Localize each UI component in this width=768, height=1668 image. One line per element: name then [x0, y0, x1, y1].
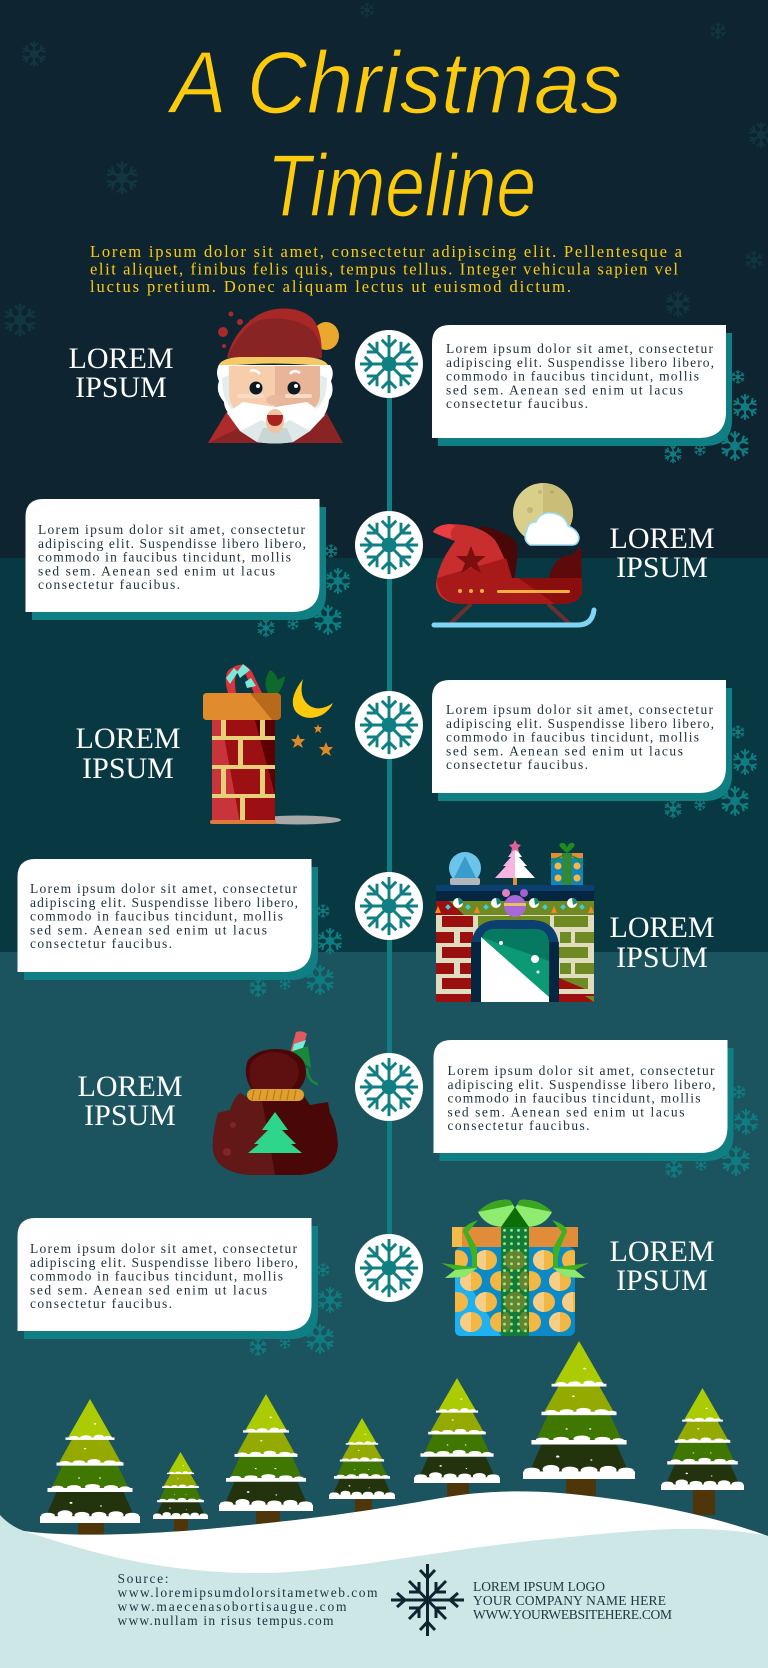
card 1: sed sem. Aenean sed enim ut lacus: [446, 382, 683, 397]
card 5: Lorem ipsum dolor sit amet, consectetur: [448, 1063, 715, 1078]
timeline node 4: [355, 872, 423, 940]
icon: santa: [208, 308, 343, 444]
icon: footer snowflake: [391, 1564, 464, 1636]
intro text: luctus pretium. Donec aliquam lectus ut euismod dictum.: [90, 277, 571, 296]
card 2: commodo in faucibus tincidunt, mollis: [38, 550, 291, 565]
card 6: Lorem ipsum dolor sit amet, consectetur: [30, 1241, 298, 1256]
card 4: Lorem ipsum dolor sit amet, consectetur: [30, 881, 298, 896]
card 1: adipiscing elit. Suspendisse libero libero,: [446, 355, 714, 370]
timeline node 6: [355, 1234, 423, 1302]
row 6: [18, 1200, 714, 1356]
label: lorem ipsum 5: IPSUM: [84, 1099, 176, 1132]
card 5: sed sem. Aenean sed enim ut lacus: [448, 1104, 684, 1119]
icon: sleigh: [433, 483, 594, 625]
card 3: [432, 680, 758, 818]
card 4: commodo in faucibus tincidunt, mollis: [30, 909, 283, 924]
timeline node 3: [355, 691, 423, 759]
label: lorem ipsum 5: LOREM: [78, 1070, 182, 1103]
icon: gift: [441, 1200, 589, 1336]
row 4: [18, 840, 714, 1002]
label: lorem ipsum 1: [68, 342, 174, 404]
source text: [118, 1571, 378, 1628]
timeline node 2: [355, 511, 423, 579]
row 2: [26, 483, 714, 637]
title: [166, 33, 622, 235]
card 5: adipiscing elit. Suspendisse libero libero,: [448, 1077, 716, 1092]
card 1: [432, 325, 758, 463]
card 3: consectetur faucibus.: [446, 757, 588, 772]
row 1: [68, 308, 758, 463]
source text: www.loremipsumdolorsitametweb.com: [118, 1585, 378, 1600]
card 4: consectetur faucibus.: [30, 936, 172, 951]
timeline node 5: [355, 1053, 423, 1121]
intro text: elit aliquet, finibus felis quis, tempus tellus. Integer vehicula sapien vel: [90, 260, 678, 278]
forest of trees: [40, 1341, 744, 1538]
card 6: sed sem. Aenean sed enim ut lacus: [30, 1282, 267, 1297]
label: lorem ipsum 3: [76, 722, 180, 785]
label: lorem ipsum 6: LOREM: [610, 1235, 714, 1268]
source text: www.maecenasobortisaugue.com: [118, 1599, 347, 1614]
logo text: WWW.YOURWEBSITEHERE.COM: [473, 1607, 672, 1622]
card 3: commodo in faucibus tincidunt, mollis: [446, 730, 699, 745]
label: lorem ipsum 2: [610, 522, 714, 584]
card 5: commodo in faucibus tincidunt, mollis: [448, 1091, 700, 1106]
card 4: sed sem. Aenean sed enim ut lacus: [30, 922, 267, 937]
intro text: Lorem ipsum dolor sit amet, consectetur adipiscing elit. Pellentesque a: [90, 242, 683, 261]
footer ground: [0, 1515, 768, 1668]
card 3: sed sem. Aenean sed enim ut lacus: [446, 743, 683, 758]
icon: chimney: [203, 664, 341, 824]
card 1: consectetur faucibus.: [446, 396, 588, 411]
timeline node 1: [355, 330, 423, 398]
intro text: [90, 242, 683, 296]
card 5: consectetur faucibus.: [448, 1118, 590, 1133]
source text: www.nullam in risus tempus.com: [118, 1613, 334, 1628]
logo text: [473, 1579, 672, 1622]
card 1: Lorem ipsum dolor sit amet, consectetur: [446, 341, 714, 356]
label: lorem ipsum 4: LOREM: [610, 911, 714, 944]
title: Timeline: [267, 136, 536, 235]
card 3: Lorem ipsum dolor sit amet, consectetur: [446, 702, 714, 717]
label: lorem ipsum 4: IPSUM: [616, 941, 708, 974]
card 4: [18, 859, 343, 997]
label: lorem ipsum 1: LOREM: [68, 342, 174, 375]
card 2: sed sem. Aenean sed enim ut lacus: [38, 563, 275, 578]
row 5: [78, 1031, 759, 1178]
card 2: consectetur faucibus.: [38, 577, 180, 592]
background snowflakes: [3, 3, 768, 337]
label: lorem ipsum 5: [78, 1070, 182, 1132]
label: lorem ipsum 2: LOREM: [610, 522, 714, 555]
icon: fireplace: [435, 840, 594, 1002]
card 2: adipiscing elit. Suspendisse libero libero,: [38, 536, 306, 551]
logo text: YOUR COMPANY NAME HERE: [473, 1593, 666, 1608]
row 3: [76, 664, 758, 824]
card 1: commodo in faucibus tincidunt, mollis: [446, 369, 699, 384]
label: lorem ipsum 6: [610, 1235, 714, 1297]
title: A Christmas: [166, 33, 622, 132]
card 5: [434, 1040, 759, 1178]
card 6: commodo in faucibus tincidunt, mollis: [30, 1269, 283, 1284]
card 6: consectetur faucibus.: [30, 1296, 172, 1311]
label: lorem ipsum 6: IPSUM: [616, 1264, 708, 1297]
label: lorem ipsum 1: IPSUM: [75, 371, 167, 404]
card 4: adipiscing elit. Suspendisse libero libero,: [30, 895, 298, 910]
label: lorem ipsum 2: IPSUM: [616, 551, 708, 584]
card 3: adipiscing elit. Suspendisse libero libero,: [446, 716, 714, 731]
card 2: [26, 499, 351, 637]
icon: sack: [213, 1031, 338, 1175]
card 2: Lorem ipsum dolor sit amet, consectetur: [38, 522, 306, 537]
label: lorem ipsum 4: [610, 911, 714, 974]
label: lorem ipsum 3: IPSUM: [82, 752, 174, 785]
card 6: adipiscing elit. Suspendisse libero libero,: [30, 1255, 298, 1270]
card 6: [18, 1218, 343, 1356]
timeline line: [387, 363, 392, 1268]
snow hill: [24, 1491, 768, 1580]
label: lorem ipsum 3: LOREM: [76, 722, 180, 755]
logo text: LOREM IPSUM LOGO: [473, 1579, 605, 1594]
source text: Source:: [118, 1571, 168, 1586]
